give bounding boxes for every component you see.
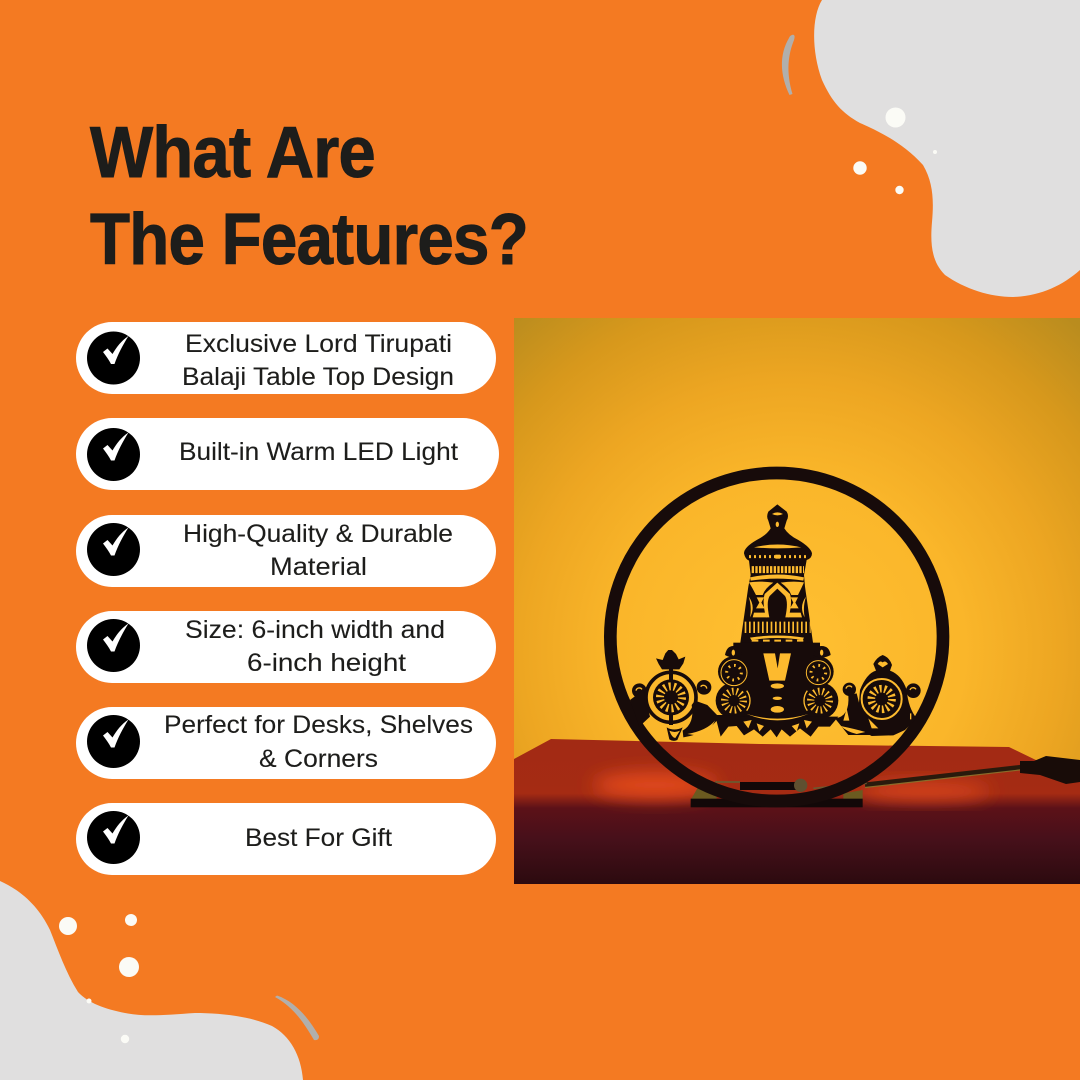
emblem: temple tower bbox=[740, 504, 813, 645]
photo: red table bbox=[514, 739, 1080, 884]
emblem: ring bbox=[610, 473, 943, 801]
feature pill 1 bbox=[76, 322, 496, 394]
feature pill 4: Size: 6-inch width and bbox=[185, 616, 445, 644]
feature pill 2: Built-in Warm LED Light bbox=[179, 438, 458, 466]
photo: wall backdrop bbox=[514, 318, 1080, 760]
feature pill 3: Material bbox=[270, 553, 367, 581]
blob: bottom left bbox=[0, 881, 303, 1080]
feature pill 6: Best For Gift bbox=[245, 824, 392, 852]
feature pill 4: 6-inch height bbox=[247, 649, 406, 677]
title: The Features? bbox=[90, 200, 528, 280]
feature pill 2 bbox=[76, 418, 499, 490]
title: What Are bbox=[90, 113, 375, 193]
decorative streak: bottom bbox=[275, 996, 319, 1040]
decorative dots: top right bbox=[853, 108, 937, 194]
feature pill 5: & Corners bbox=[259, 745, 378, 773]
feature pill 5: Perfect for Desks, Shelves bbox=[164, 711, 473, 739]
feature pill 1: Exclusive Lord Tirupati bbox=[185, 330, 452, 358]
feature pill 3: High-Quality & Durable bbox=[183, 520, 453, 548]
feature pill 1: Balaji Table Top Design bbox=[182, 363, 454, 391]
photo: power cable and plug bbox=[865, 756, 1080, 788]
blob: top right bbox=[814, 0, 1080, 297]
title bbox=[90, 113, 528, 280]
emblem: central figure with tilak and side ornaments bbox=[715, 643, 838, 737]
chakra: lotus crown bbox=[656, 650, 685, 669]
feature pill 6 bbox=[76, 803, 496, 875]
emblem: right conch bbox=[835, 655, 921, 736]
product photo bbox=[514, 318, 1080, 884]
feature pill 5 bbox=[76, 707, 496, 779]
feature pill 3 bbox=[76, 515, 496, 587]
emblem: base bbox=[691, 779, 867, 807]
decorative streak: top bbox=[782, 35, 795, 95]
feature list bbox=[76, 322, 499, 875]
photo: lamp emblem bbox=[610, 473, 943, 807]
emblem: left chakra bbox=[630, 650, 719, 741]
decorative dots: bottom left bbox=[59, 914, 139, 1043]
feature pill 4 bbox=[76, 611, 496, 683]
